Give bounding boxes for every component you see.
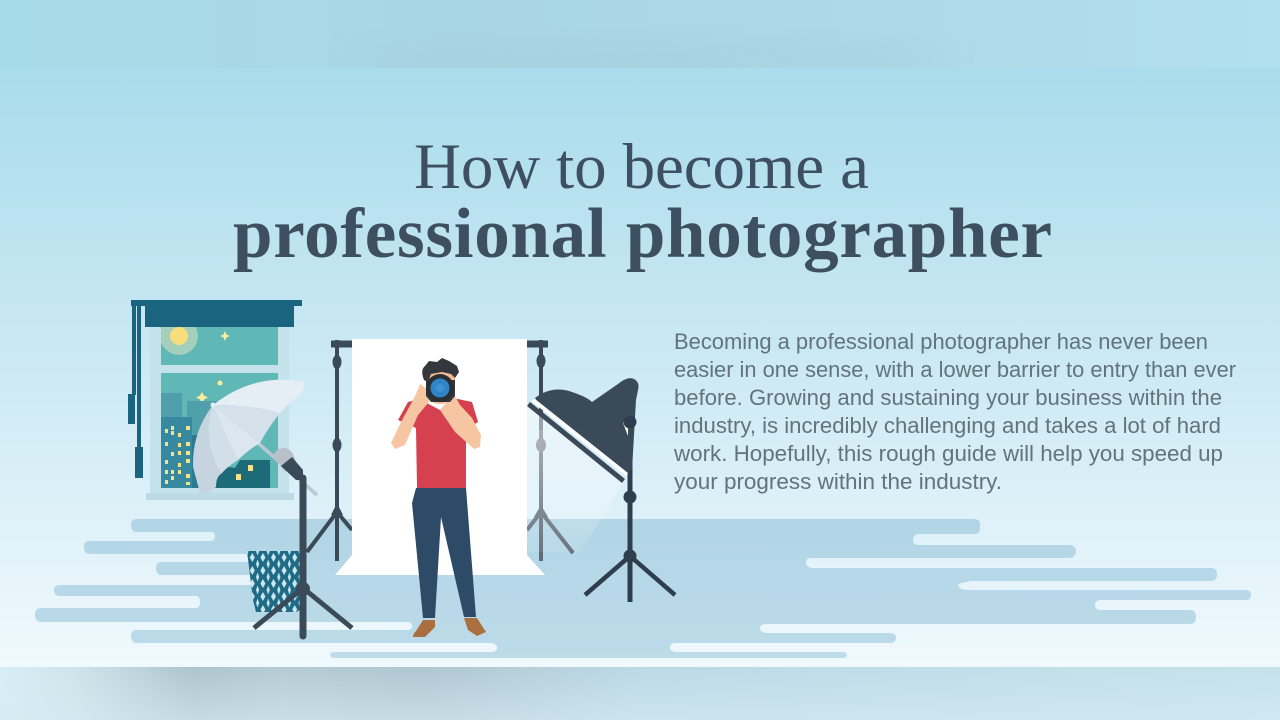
back stand right xyxy=(527,340,573,561)
light stand xyxy=(585,415,675,602)
softbox diffuser xyxy=(531,399,628,476)
umbrella head xyxy=(273,448,297,472)
top band xyxy=(0,0,1280,72)
roller blind xyxy=(145,304,294,327)
intro paragraph: easier in one sense, with a lower barrier to entry than ever xyxy=(674,357,1236,382)
intro paragraph: industry, is incredibly challenging and takes a lot of hard xyxy=(674,413,1221,438)
arms xyxy=(391,384,481,449)
bottom band xyxy=(0,667,1280,720)
window frame xyxy=(150,322,289,494)
title line 1: How to become a xyxy=(414,131,869,203)
softbox light xyxy=(527,378,675,602)
top pane xyxy=(161,327,278,365)
hair xyxy=(422,358,459,382)
stars xyxy=(196,331,230,404)
window xyxy=(128,300,302,500)
wire basket xyxy=(247,551,300,612)
softbox body xyxy=(535,378,638,474)
umbrella canopy xyxy=(193,380,305,493)
umbrella stand xyxy=(254,478,352,636)
softbox strip xyxy=(527,402,625,483)
intro paragraph: Becoming a professional photographer has never been xyxy=(674,329,1208,354)
shoes xyxy=(413,620,435,637)
title line 2: professional photographer xyxy=(233,195,1052,273)
face xyxy=(426,372,455,404)
photographer xyxy=(391,358,486,637)
beard xyxy=(426,380,455,402)
intro paragraph: work. Hopefully, this rough guide will help you speed up xyxy=(673,441,1223,466)
floor with stripes xyxy=(35,519,1251,658)
intro paragraph: your progress within the industry. xyxy=(674,469,1002,494)
light beam xyxy=(527,404,624,552)
shirt xyxy=(398,398,478,488)
intro paragraph xyxy=(673,329,1236,494)
camera xyxy=(426,374,454,402)
blind cords xyxy=(128,300,143,478)
umbrella rod xyxy=(258,443,317,495)
sun xyxy=(161,327,198,355)
back stand left xyxy=(307,340,352,561)
trousers xyxy=(412,488,476,618)
window sill xyxy=(146,493,294,500)
bottom pane xyxy=(161,373,278,488)
umbrella light xyxy=(193,380,352,636)
blind rail xyxy=(131,300,302,306)
city buildings xyxy=(161,393,270,488)
backdrop xyxy=(335,339,545,575)
title xyxy=(233,131,1052,273)
softbox mount knob xyxy=(623,416,636,436)
intro paragraph: before. Growing and sustaining your business within the xyxy=(674,385,1222,410)
